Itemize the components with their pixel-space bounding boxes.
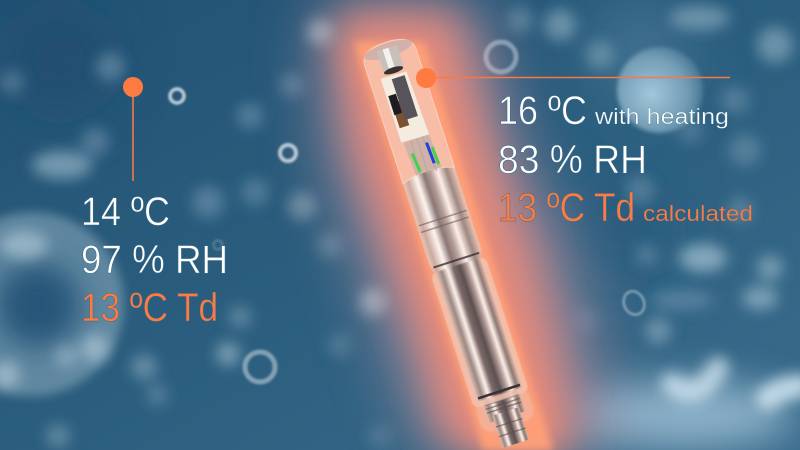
probe — [358, 33, 544, 450]
probe: sensor assembly — [372, 44, 441, 179]
probe: connector and cable — [473, 384, 543, 450]
text: left readings: 97 % RH — [81, 238, 228, 282]
probe: transparent capsule — [360, 34, 454, 184]
text: right readings: 13 ºC Td — [498, 186, 635, 230]
probe: upper metal sleeve — [402, 162, 484, 273]
orange heat glow — [312, 0, 610, 450]
bubbles over the glow — [170, 19, 648, 382]
text: right readings: 83 % RH — [498, 138, 647, 182]
large bubble, left — [0, 212, 124, 396]
probe: main tube — [429, 252, 529, 409]
callout: right marker — [416, 68, 730, 88]
callout: left marker — [123, 77, 143, 181]
text: right readings — [498, 89, 753, 230]
text: left readings: 14 ºC — [81, 190, 170, 234]
text: left readings — [81, 190, 228, 330]
text: left readings: 13 ºC Td — [81, 286, 218, 330]
text: right readings: calculated — [643, 201, 753, 226]
text: right readings: 16 ºC — [498, 89, 587, 133]
text: right readings: with heating — [594, 104, 729, 129]
